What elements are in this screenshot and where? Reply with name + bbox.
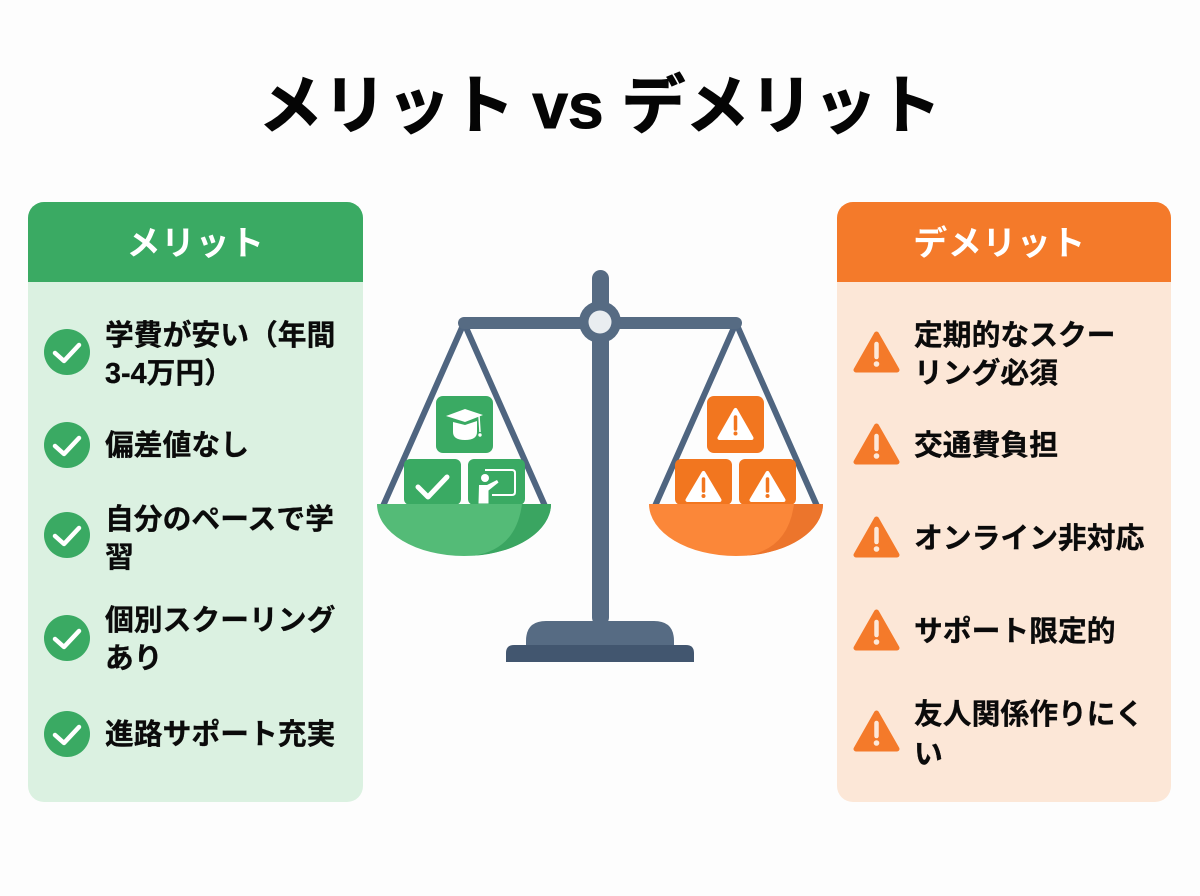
merit item 3: 習 <box>105 542 134 574</box>
block: graduation cap <box>436 396 493 453</box>
block: teacher at board <box>468 459 525 505</box>
merit item 5 <box>44 711 335 757</box>
panel heading: merits <box>28 202 363 282</box>
merit item 3: 自分のペースで学 <box>105 504 334 536</box>
demerit item 1: リング必須 <box>914 358 1058 390</box>
scale post and base <box>506 270 694 662</box>
panel heading: demerits: デメリット <box>913 225 1086 263</box>
panel: merits <box>28 202 363 802</box>
block: check mark <box>404 459 461 505</box>
merit item 4: あり <box>105 643 163 675</box>
demerit item 1 <box>854 320 1116 390</box>
merit item 5: 進路サポート充実 <box>105 719 335 751</box>
demerit item 5 <box>854 699 1144 770</box>
demerit item 2 <box>854 424 1058 464</box>
demerit item 3 <box>854 516 1144 558</box>
right chains <box>655 323 817 506</box>
demerit item 3: オンライン非対応 <box>914 523 1144 555</box>
demerit item 1: 定期的なスクー <box>914 320 1116 352</box>
scale beam <box>458 301 742 343</box>
merit item 1: 学費が安い（年間 <box>105 320 335 352</box>
block: warning left <box>675 459 732 505</box>
merit item 4: 個別スクーリング <box>105 605 335 637</box>
merit item 3 <box>44 504 334 574</box>
merit item 2 <box>44 422 249 468</box>
demerit item 4: サポート限定的 <box>914 616 1116 648</box>
panel: demerits <box>837 202 1171 802</box>
merit item 4 <box>44 604 335 675</box>
left pan <box>377 504 551 556</box>
demerit item 5: 友人関係作りにく <box>914 699 1144 731</box>
demerit item 4 <box>854 610 1116 650</box>
left chains <box>383 323 545 506</box>
panel heading: demerits <box>837 202 1171 282</box>
block: warning right <box>739 459 796 505</box>
title: メリット vs デメリット <box>259 70 941 142</box>
demerit item 2: 交通費負担 <box>914 430 1058 462</box>
demerit item 5: い <box>914 738 943 770</box>
merit item 1 <box>44 320 335 390</box>
merit item 2: 偏差値なし <box>105 430 249 462</box>
merit item 1: 3-4万円） <box>105 358 233 390</box>
block: warning top <box>707 396 764 453</box>
panel heading: merits: メリット <box>126 225 264 263</box>
right pan <box>649 504 823 556</box>
